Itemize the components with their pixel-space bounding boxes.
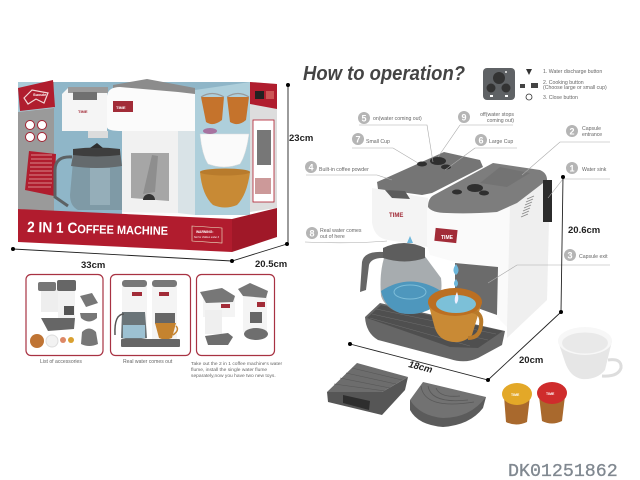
button legend: (Choose large or small cup) — [543, 85, 607, 91]
main coffee machine — [360, 152, 552, 361]
brand logo tag — [18, 80, 55, 111]
machine dimension lines: 18cm — [407, 359, 434, 376]
glass jug — [55, 143, 122, 210]
capsule exit — [455, 263, 498, 315]
yellow capsule: TIME — [511, 393, 520, 397]
callout 2: entrance — [582, 132, 602, 138]
caption: two toys — [191, 361, 282, 379]
dimension labels: 23cm — [289, 133, 313, 144]
removable tray one — [327, 363, 408, 415]
machine dimension lines: 20cm — [519, 355, 543, 366]
thumbnail 2: water — [110, 274, 190, 356]
coffee machine in box: TIME — [116, 105, 126, 110]
machine logo — [113, 101, 133, 112]
callout 5: on(water coming out) — [373, 116, 422, 122]
callout 6: Large Cup — [489, 139, 513, 145]
white cup — [558, 327, 621, 379]
machine left head — [62, 88, 107, 131]
water drops — [454, 264, 458, 287]
callout 2 — [566, 125, 602, 138]
separate machine one — [203, 297, 235, 317]
separate machine two — [243, 292, 267, 332]
jug and cup — [121, 312, 147, 340]
legend text: 1. Water discharge button — [543, 69, 602, 75]
red front band — [18, 209, 232, 252]
box right side panel — [250, 82, 277, 212]
heading: How to operation? — [303, 63, 465, 85]
left module lid — [377, 152, 483, 195]
box dimension lines: 20.5cm — [255, 259, 287, 270]
warning label — [192, 226, 222, 243]
button legend: 2. Cooking button — [543, 80, 584, 86]
right logo: TIME — [441, 235, 454, 241]
feature icons — [26, 120, 46, 142]
left logo: TIME — [389, 213, 403, 219]
callout 4 — [305, 161, 369, 173]
callout 8: 8 — [309, 228, 315, 238]
right module body — [427, 178, 549, 338]
callout 9 — [458, 111, 514, 124]
tray — [121, 339, 180, 347]
machine dimension lines — [348, 175, 600, 382]
twin machines — [122, 283, 147, 339]
button legend — [520, 69, 607, 101]
callout 5 — [358, 112, 422, 124]
accessories machine — [41, 290, 58, 312]
control knobs on lids — [417, 157, 489, 196]
cups in box — [200, 94, 250, 208]
box interior background — [53, 82, 250, 215]
caption: two toys: Take out the 2 in 1 coffee machine's water — [191, 361, 282, 367]
callout 9: 9 — [461, 112, 467, 122]
callout 7: Small Cup — [366, 139, 390, 145]
callout 1 — [566, 162, 607, 174]
callout lines — [305, 125, 610, 283]
coffee machine in box — [55, 79, 195, 215]
callout 6 — [475, 134, 513, 146]
right module lid — [428, 163, 547, 213]
drip tray — [365, 303, 505, 361]
red capsule: TIME — [546, 392, 555, 396]
right logo — [434, 228, 458, 243]
removable tray two — [410, 382, 486, 427]
thumbnail 3: two toys — [196, 274, 274, 356]
caption: two toys: separately,now you have two new toys. — [191, 373, 276, 379]
caption: two toys: flume, install the single water flume — [191, 367, 267, 373]
orange cup — [428, 288, 482, 342]
callout 7 — [352, 133, 390, 145]
callout 9: off(water stops — [480, 112, 514, 118]
machine right body — [107, 87, 195, 215]
left module body — [372, 188, 428, 247]
callout 5: 5 — [361, 114, 367, 124]
warning label: Not for children under 3 — [194, 236, 220, 239]
black water sink — [543, 180, 552, 222]
callout 2: Capsule — [582, 126, 601, 132]
box right inner panel — [195, 82, 250, 215]
caption: water: Real water comes out — [123, 359, 173, 365]
callout 9: coming out) — [487, 118, 514, 124]
callout 4: 4 — [308, 162, 314, 172]
box left grey panel — [18, 82, 54, 212]
callout 8: out of here — [320, 234, 345, 240]
callout 1: 1 — [569, 164, 575, 174]
capsule slot — [131, 153, 169, 201]
callout 3 — [564, 249, 608, 261]
product box — [18, 79, 277, 252]
box dimension lines — [11, 83, 313, 271]
caption: accessories: List of accessories — [40, 359, 82, 365]
machine top grey lid — [113, 79, 195, 95]
red capsule — [537, 382, 567, 424]
callout 1: Water sink — [582, 167, 607, 173]
accessory trays — [80, 293, 98, 307]
yellow capsule — [502, 383, 532, 424]
callout 8 — [306, 227, 362, 240]
accessory jug and cups — [81, 328, 98, 346]
product title on box: 2 IN 1 COFFEE MACHINE — [27, 219, 168, 239]
control panel icon — [483, 68, 515, 100]
coffee machine in box: TIME — [78, 109, 88, 114]
glass jug — [360, 236, 442, 314]
machine dimension labels: 20.6cm — [568, 225, 600, 236]
callout 7: 7 — [355, 134, 361, 144]
callout 2: 2 — [569, 126, 575, 136]
callout 3: Capsule exit — [579, 254, 608, 260]
brand logo tag: Suoule — [33, 92, 47, 97]
warning label: WARNING: — [196, 230, 214, 234]
callout 6: 6 — [478, 136, 484, 146]
red text label on box — [25, 151, 56, 196]
callout 8: Real water comes — [320, 228, 362, 234]
callout 4: Built-in coffee powder — [319, 167, 369, 173]
button legend: 3. Close button — [543, 95, 578, 101]
thumbnail 1: accessories — [26, 274, 103, 356]
legend icons — [526, 69, 532, 75]
callout 3: 3 — [567, 250, 573, 260]
vent slots — [521, 196, 534, 217]
box dimension lines: 33cm — [81, 260, 105, 271]
